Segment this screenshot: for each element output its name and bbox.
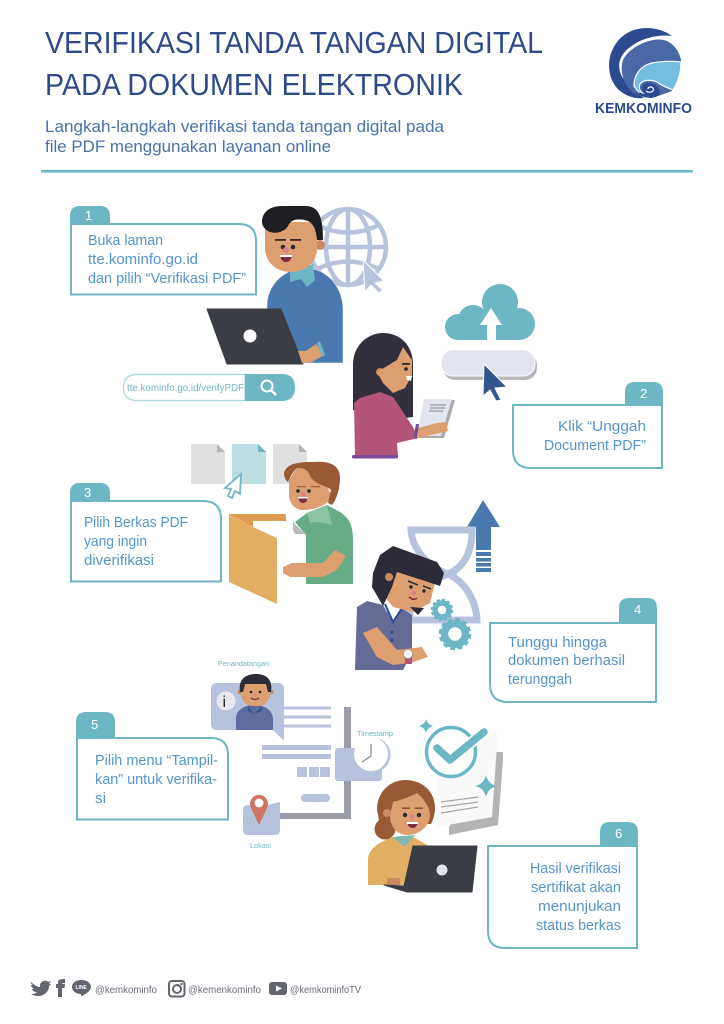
icon: twitter (31, 981, 51, 996)
icon: verified document with check mark (419, 719, 503, 835)
step 5 callout: Pilih menu “Tampil- (95, 753, 218, 769)
step 4 callout: Tunggu hingga (508, 635, 608, 651)
step 1 callout (70, 206, 256, 294)
step 4 callout: terunggah (508, 672, 572, 688)
step 1 callout: 1 (85, 208, 92, 223)
step 6 callout: sertifikat akan (531, 880, 621, 896)
timestamp clock (335, 737, 390, 781)
step 2 callout: 2 (640, 386, 647, 401)
chart: signature certificate diagram (211, 659, 393, 850)
step 3 callout (70, 483, 221, 582)
step 2 callout (513, 382, 663, 468)
step 3 callout: diverifikasi (84, 553, 154, 569)
label: Penandatangan: Penandatangan (218, 659, 269, 668)
step 1 callout: tte.kominfo.go.id (88, 252, 198, 268)
illustration: woman waiting (355, 546, 444, 670)
step 4 callout: 4 (634, 602, 641, 617)
icon: hourglass (410, 530, 477, 620)
icon: instagram (169, 981, 184, 996)
illustration: man with folder (229, 462, 353, 604)
step 3 callout: yang ingin (84, 534, 147, 550)
illustration: man with laptop (207, 206, 343, 364)
step 5 callout: si (95, 791, 106, 807)
icon: LINE: LINE (76, 985, 88, 991)
location pin (243, 795, 280, 835)
step 2 callout: Document PDF” (544, 438, 646, 454)
step 3 callout: Pilih Berkas PDF (84, 515, 188, 531)
footer: social media handles (31, 979, 361, 997)
step 2 callout: Klik “Unggah (558, 419, 646, 435)
title: PADA DOKUMEN ELEKTRONIK (45, 67, 463, 102)
icon: upload arrow (467, 500, 500, 572)
icon: globe with cursor (310, 209, 386, 293)
text: kemkominfoTV: @kemkominfoTV (290, 984, 361, 996)
step 5 callout: kan” untuk verifika- (95, 772, 217, 788)
illustration: woman with laptop (368, 780, 477, 892)
icon: upload button with cursor (441, 350, 537, 401)
icon: gears (432, 600, 470, 648)
step 1 callout: dan pilih “Verifikasi PDF” (88, 271, 246, 287)
step 4 callout: dokumen berhasil (508, 653, 625, 669)
step 6 callout (488, 822, 638, 948)
text: kemkominfo: @kemkominfo (95, 984, 157, 996)
step 4 callout (490, 598, 657, 702)
title (45, 25, 543, 102)
icon: LINE (72, 980, 91, 996)
step 6 callout: Hasil verifikasi (530, 861, 621, 877)
subtitle (45, 118, 445, 156)
label: Lokasi: Lokasi (250, 841, 271, 850)
step 6 callout: 6 (615, 826, 622, 841)
title: VERIFIKASI TANDA TANGAN DIGITAL (45, 25, 543, 60)
step 5 callout: 5 (91, 717, 98, 732)
text: kemenkominfo: @kemenkominfo (188, 984, 261, 996)
step 1 callout: Buka laman (88, 233, 163, 249)
step 5 callout (76, 712, 228, 820)
illustration: woman reading document (352, 333, 455, 458)
signer bubble: i (222, 694, 226, 711)
search bar (124, 374, 295, 401)
subtitle: file PDF menggunakan layanan online (45, 138, 331, 156)
icon: cloud upload (445, 284, 535, 340)
icon: facebook (56, 979, 65, 997)
logo: Kemkominfo (595, 28, 692, 117)
step 6 callout: menunjukan (538, 899, 621, 915)
search bar: tte.kominfo.go.id/verifyPDF (127, 382, 244, 394)
step 3 callout: 3 (84, 485, 91, 500)
icon: youtube (269, 982, 287, 995)
step 6 callout: status berkas (536, 918, 621, 934)
icon: three document files with cursor (191, 444, 307, 498)
subtitle: Langkah-langkah verifikasi tanda tangan digital pada (45, 118, 445, 136)
signer bubble (211, 674, 284, 741)
label: Timestamp: Timestamp (357, 729, 393, 738)
logo: Kemkominfo: KEMKOMINFO (595, 100, 692, 117)
